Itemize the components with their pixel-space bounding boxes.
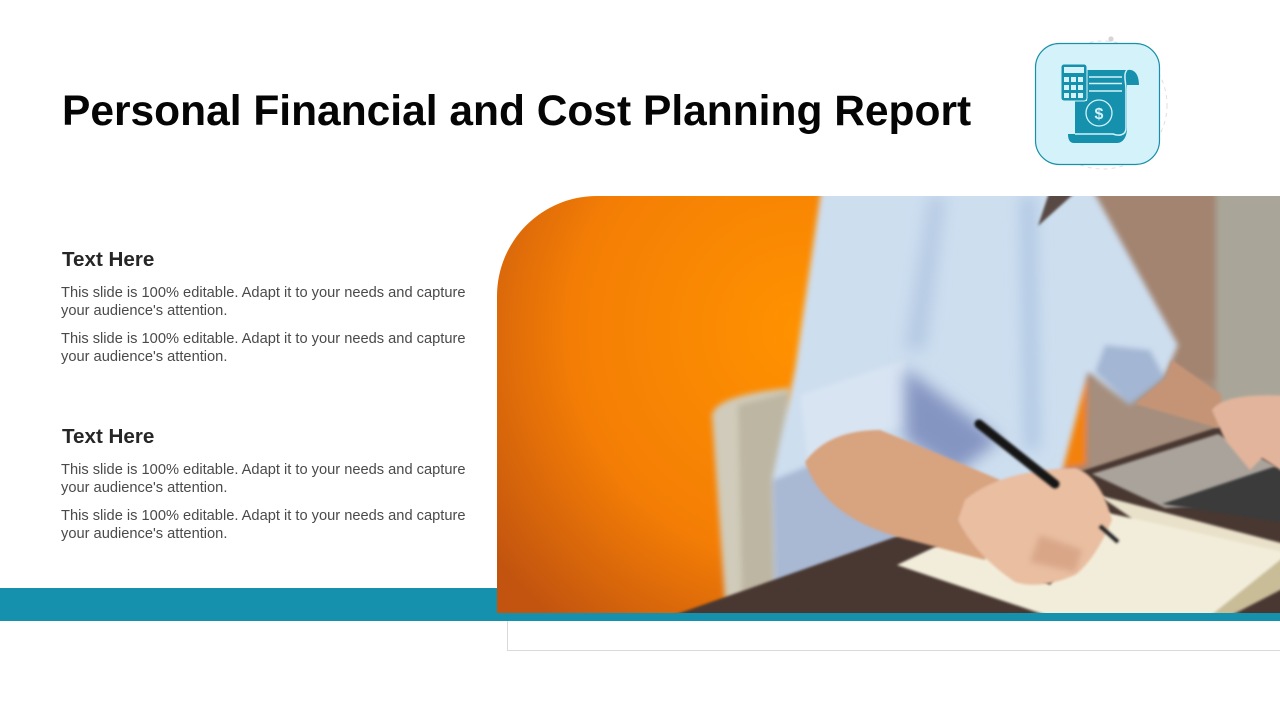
wall on the right (1061, 196, 1280, 472)
text block: first section: your audience's attention. (61, 303, 227, 319)
text block: first section (61, 248, 466, 365)
outline frame below photo (507, 621, 1280, 651)
teal band (0, 588, 1280, 621)
desk (674, 426, 1280, 613)
chair (712, 388, 790, 600)
text block: first section: This slide is 100% editable. Adapt it to your needs and capture (61, 285, 466, 301)
text block: second section: your audience's attention. (61, 526, 227, 542)
text block: second section: Text Here (62, 425, 154, 448)
text block: first section: This slide is 100% editable. Adapt it to your needs and capture (61, 331, 466, 347)
text block: second section (61, 425, 466, 542)
text block: second section: This slide is 100% editable. Adapt it to your needs and capture (61, 462, 466, 478)
pen (979, 424, 1118, 542)
notebook (897, 495, 1280, 620)
title: Personal Financial and Cost Planning Report (62, 88, 971, 135)
text block: first section: Text Here (62, 248, 154, 271)
icon: calculator and bill in rounded tile (1034, 36, 1168, 170)
keyboard (1162, 466, 1280, 522)
text block: first section: your audience's attention. (61, 349, 227, 365)
icon: calculator and bill in rounded tile: $ (1095, 106, 1104, 123)
text block: second section: This slide is 100% editable. Adapt it to your needs and capture (61, 508, 466, 524)
collar (1037, 196, 1074, 226)
photo: man writing at a desk (497, 196, 1280, 613)
shirt (769, 196, 1182, 580)
left forearm and writing hand (805, 430, 1112, 585)
right forearm and hand (1135, 360, 1280, 476)
laptop (1092, 434, 1280, 508)
text block: second section: your audience's attention. (61, 480, 227, 496)
